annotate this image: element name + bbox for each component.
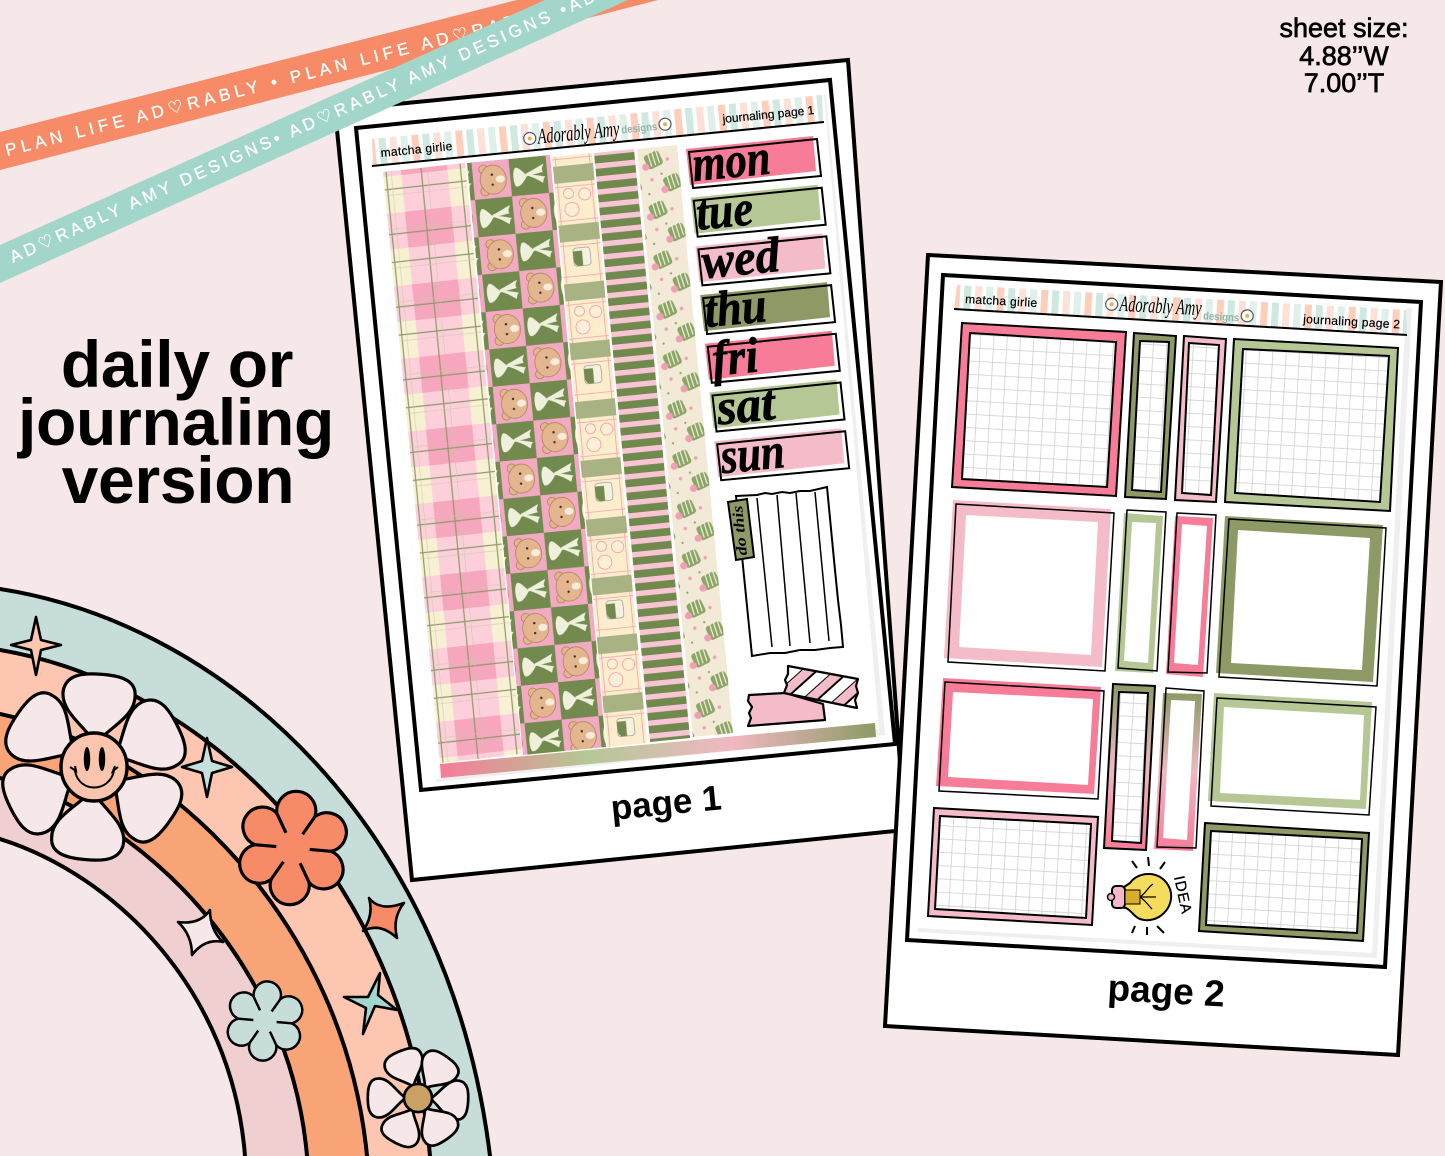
text: sheet size: 7.00’’T xyxy=(1304,68,1384,98)
rainbow band: pink xyxy=(0,772,309,1156)
strip: plaid washi xyxy=(383,163,522,763)
page 1 title: journaling page 1 xyxy=(721,103,815,126)
day label: thu: thu xyxy=(702,276,769,338)
text: sheet size: 4.88’’W xyxy=(1299,41,1389,71)
flower: small daisy xyxy=(368,1044,469,1152)
box: light green blank wide xyxy=(1208,693,1376,815)
flower: teal xyxy=(225,978,305,1064)
do this tab xyxy=(728,499,754,560)
box: light pink wide grid xyxy=(928,808,1098,925)
day label: thu xyxy=(700,276,835,338)
page 2 theme name: matcha girlie xyxy=(965,292,1038,310)
box: gradient narrow grid xyxy=(1104,684,1155,850)
page 1 theme name: matcha girlie xyxy=(380,139,453,160)
star: mint xyxy=(344,973,397,1034)
strip: matcha cake pattern xyxy=(637,145,733,737)
rainbow band: orange xyxy=(0,708,369,1156)
page 1 logo: designs xyxy=(621,121,658,136)
page 1 header stripe xyxy=(372,95,823,165)
page 2 logo: Adorably Amy xyxy=(1118,291,1202,320)
page 1 card outline xyxy=(335,60,905,880)
strip: strawberries and matcha xyxy=(552,153,647,747)
star: orange xyxy=(363,898,404,938)
page 2 title: journaling page 2 xyxy=(1302,312,1401,331)
rainbow band: peach xyxy=(0,645,432,1156)
page 1 logo: Adorably Amy xyxy=(535,116,621,149)
icon: idea light bulb xyxy=(1108,857,1195,935)
box: pink narrow blank xyxy=(1166,513,1216,677)
box: dark green blank xyxy=(1216,516,1386,686)
washi tape: striped xyxy=(784,666,858,708)
page 2 card outline xyxy=(885,255,1441,1055)
page 1 sheet shadow xyxy=(369,95,885,782)
strip: green and pink stripes xyxy=(594,149,690,742)
gradient bar xyxy=(440,723,876,778)
heading: daily or journaling version: version xyxy=(62,443,294,517)
page 2 header stripe xyxy=(954,285,1407,335)
day label: fri xyxy=(705,327,840,387)
flower: orange xyxy=(236,787,350,909)
box: pink blank wide xyxy=(936,678,1104,799)
do this tab: do this xyxy=(730,505,751,556)
star: peach sparkle xyxy=(11,617,61,675)
day label: fri: fri xyxy=(709,327,761,387)
heading: daily or journaling version: daily or xyxy=(61,327,293,401)
day label: wed xyxy=(695,226,830,289)
box: light pink narrow grid xyxy=(1175,336,1226,502)
washi tape: pink xyxy=(748,693,825,726)
page 2 sheet shadow xyxy=(918,284,1412,958)
box: dark green narrow grid xyxy=(1125,333,1176,499)
strip: bears and bows checkerboard xyxy=(467,155,606,755)
box: gradient narrow blank xyxy=(1154,688,1204,851)
idea label: IDEA xyxy=(1170,874,1195,916)
smiley face xyxy=(61,733,127,801)
page 2 sheet frame xyxy=(907,275,1421,967)
star: pale teal sparkle xyxy=(182,738,232,797)
day label: mon: mon xyxy=(690,129,773,192)
to-do list card xyxy=(728,487,843,656)
heading: daily or journaling version: journaling xyxy=(16,385,334,459)
day label: sun: sun xyxy=(717,422,787,484)
text: sheet size: sheet size: xyxy=(1279,13,1409,43)
day label: sat: sat xyxy=(713,374,779,436)
day label: sat xyxy=(710,374,844,436)
box: dark green wide grid xyxy=(1199,823,1369,941)
page 2 logo: designs xyxy=(1203,310,1239,324)
star: white xyxy=(178,910,223,955)
box: pink grid xyxy=(952,323,1126,496)
day label: tue: tue xyxy=(693,179,756,241)
day label: wed: wed xyxy=(699,226,783,289)
heading: daily or journaling version xyxy=(16,327,334,517)
flower: smiley daisy xyxy=(0,672,193,863)
page 2 caption: page 2 xyxy=(1107,967,1226,1015)
page 1 caption: page 1 xyxy=(609,778,723,828)
page 1 sheet frame xyxy=(356,80,895,790)
box: light green narrow blank xyxy=(1115,510,1166,673)
panel: page 1 sheet card xyxy=(335,60,905,880)
rainbow band: teal xyxy=(0,584,492,1156)
box: light green grid xyxy=(1225,339,1398,511)
box: light pink blank xyxy=(944,500,1114,671)
rainbow xyxy=(0,584,492,1156)
day label: sun xyxy=(714,422,849,484)
day label: tue xyxy=(691,179,826,241)
text: sheet size xyxy=(1279,13,1409,98)
panel: page 2 sheet card xyxy=(885,255,1441,1055)
rainbow inner arch xyxy=(0,832,247,1156)
